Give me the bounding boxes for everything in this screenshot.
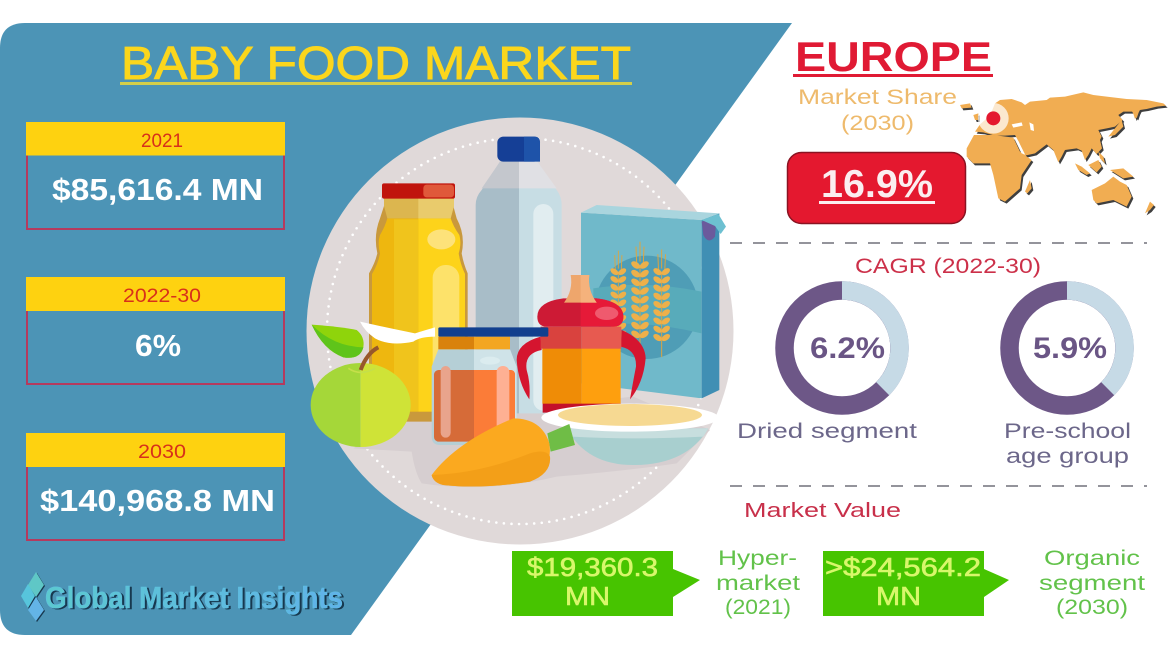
world map: Europe highlighted: [960, 92, 1168, 215]
label: pre-school age group: age group: [1006, 445, 1129, 468]
icon: baby food jar: [432, 337, 517, 445]
arrow box: hypermarket value: [512, 551, 700, 616]
panel: 2030 stat: 2030: [138, 442, 186, 463]
icon: cereal box: [581, 205, 726, 398]
label: pre-school age group: Pre-school: [1004, 420, 1131, 443]
donut: pre-school 5.9%: [1010, 290, 1125, 406]
panel: 2030 stat: $140,968.8 MN: [40, 483, 275, 518]
icon: juice bottle: [369, 183, 468, 422]
arrow box: organic value: MN: [876, 581, 921, 611]
panel: 2021 stat: $85,616.4 MN: [52, 172, 263, 207]
arrow box: hypermarket value: $19,360.3: [527, 552, 658, 582]
logo: Global Market Insights: [21, 572, 343, 621]
label: hypermarket 2021: [716, 547, 800, 619]
heading: CAGR: CAGR (2022-30): [855, 255, 1041, 278]
label: hypermarket 2021: (2021): [725, 596, 791, 619]
title: BABY FOOD MARKET: [121, 37, 631, 89]
text: market share label: Market Share: [798, 86, 957, 109]
heading: Europe: EUROPE: [795, 33, 992, 80]
icon: spoon: [360, 322, 548, 344]
wheat stalks: [609, 242, 671, 357]
icon: carrot: [432, 418, 575, 487]
label: hypermarket 2021: Hyper-: [718, 547, 797, 570]
logo: Global Market Insights: Global Market Insights: [45, 580, 343, 615]
panel: 2021 stat: [26, 122, 285, 229]
text: market share label: [798, 86, 957, 135]
divider top: [730, 242, 1147, 244]
illustration: baby food circle: [306, 118, 734, 544]
label: organic segment 2030: [1039, 547, 1145, 619]
text: market share label: (2030): [841, 112, 914, 135]
arrow box: hypermarket value: MN: [565, 581, 610, 611]
arrow box: organic value: [823, 551, 1009, 616]
heading: market value: Market Value: [744, 500, 901, 522]
label: dried segment: Dried segment: [737, 420, 917, 443]
divider bottom: [730, 485, 1147, 487]
icon: water bottle: [476, 137, 562, 413]
panel: 2022-30 stat: 2022-30: [123, 286, 201, 307]
donut: dried segment 6.2%: [784, 290, 900, 406]
label: hypermarket 2021: market: [716, 572, 800, 595]
arrow box: organic value: >$24,564.2: [825, 552, 981, 582]
callout: 16.9% share: [788, 152, 966, 224]
callout: 16.9% share: 16.9%: [821, 163, 933, 206]
panel: 2030 stat: [26, 433, 285, 540]
panel: 2021 stat: 2021: [141, 131, 183, 152]
icon: bowl: [541, 404, 719, 465]
icon: green apple: [310, 325, 411, 448]
panel: 2022-30 stat: 6%: [135, 328, 181, 363]
donut: pre-school 5.9%: 5.9%: [1033, 332, 1107, 365]
icon: sippy cup: [517, 275, 646, 413]
donut: dried segment 6.2%: 6.2%: [810, 332, 885, 365]
panel: 2022-30 stat: [26, 277, 285, 384]
floor shadow: [353, 397, 710, 487]
marker: Europe: [978, 103, 1009, 134]
panel: blue diagonal background: [0, 23, 792, 635]
label: organic segment 2030: (2030): [1056, 596, 1128, 619]
label: organic segment 2030: Organic: [1044, 547, 1140, 570]
label: organic segment 2030: segment: [1039, 572, 1145, 595]
label: pre-school age group: [1004, 420, 1131, 468]
